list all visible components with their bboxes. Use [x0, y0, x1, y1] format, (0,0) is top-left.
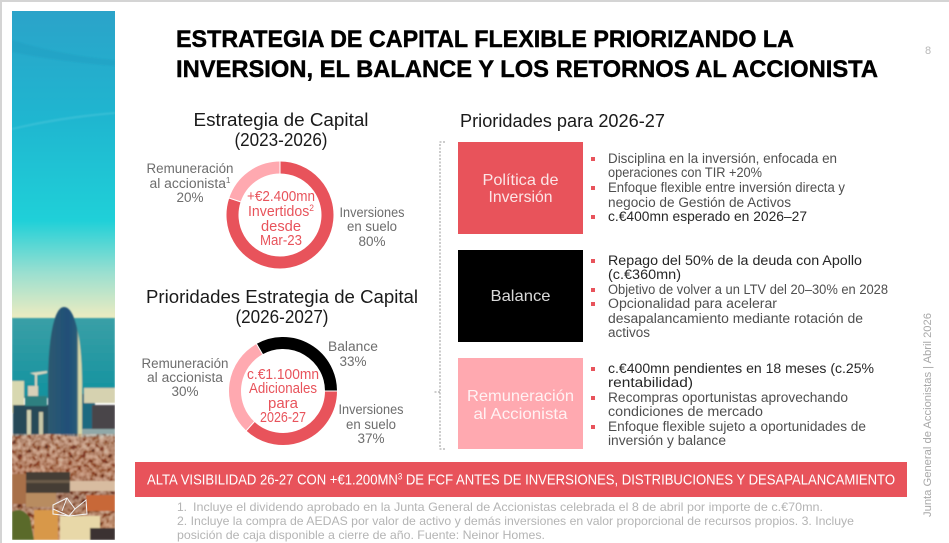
panel: balance sheet: [458, 250, 888, 342]
icon: white logo on photo: [53, 498, 87, 516]
bullet list: shareholder remuneration: rentabilidad): [608, 375, 693, 390]
bullet list: shareholder remuneration: Recompras oportunistas aprovechando: [608, 390, 848, 405]
label: land investment 37%: en suelo: [346, 417, 396, 432]
photo: Barcelona skyline with Agbar tower: [12, 11, 115, 540]
banner: FCF visibility: 3: [398, 472, 402, 482]
heading: capital strategy: Estrategia de Capital: [194, 109, 368, 130]
label: land investment 37%: [338, 402, 404, 446]
heading: priorities: [146, 286, 418, 327]
panel: investment policy: [458, 142, 845, 234]
bullet list: shareholder remuneration: condiciones de mercado: [608, 404, 763, 419]
bullet list: investment policy: [591, 151, 845, 224]
bullet list: balance: Repago del 50% de la deuda con Apollo: [608, 253, 862, 268]
bullet list: investment policy: operaciones con TIR +20%: [608, 165, 762, 180]
label: land investment 37%: 37%: [357, 431, 385, 446]
bullet list: investment policy: Enfoque flexible entre inversión directa y: [608, 180, 845, 195]
bullet list: shareholder remuneration: Enfoque flexible sujeto a oportunidades de: [608, 419, 866, 434]
box: investment policy: [458, 142, 583, 234]
footnotes: posición de caja disponible a cierre de año. Fuente: Neinor Homes.: [177, 528, 545, 542]
box: balance: Balance: [490, 288, 551, 305]
donut centre text: [247, 366, 319, 426]
banner: FCF visibility: [135, 462, 907, 497]
label: shareholder return 20%: al accionista: [150, 176, 224, 191]
box: shareholder remuneration: Remuneración: [467, 388, 574, 405]
footnotes: [177, 500, 854, 542]
page number: 8: [925, 45, 931, 57]
donut centre text: +€2.400mn: [247, 188, 315, 205]
bullet list: balance: activos: [608, 325, 650, 340]
bullet list: investment policy: c.€400mn esperado en 2026–27: [608, 209, 807, 224]
vertical side note: Junta General de Accionistas | Abril 2026: [922, 313, 934, 517]
label: land investment 80%: [340, 205, 405, 249]
bullet list: balance: (c.€360mn): [608, 267, 681, 282]
label: shareholder return 20%: 20%: [176, 190, 204, 205]
label: shareholder return 20%: Remuneración: [146, 161, 234, 176]
box: shareholder remuneration: [458, 358, 583, 449]
bullet list: balance: [591, 253, 888, 340]
bracket connecting priorities: [434, 142, 445, 449]
panel: capital strategy priorities 2026-2027: [142, 286, 418, 446]
title: ESTRATEGIA DE CAPITAL FLEXIBLE PRIORIZANDO LA: [176, 26, 794, 53]
banner: FCF visibility: ALTA VISIBILIDAD 26-27 CON +€1.200MN: [147, 472, 434, 488]
bullet list: shareholder remuneration: [591, 361, 874, 448]
label: shareholder return 20%: 1: [226, 176, 231, 185]
donut centre text: [247, 188, 315, 249]
donut centre text: Invertidos: [248, 203, 313, 220]
heading: priorities 2026-27: Prioridades para 2026-27: [460, 110, 665, 131]
label: shareholder return 20%: [146, 161, 234, 205]
box: balance: [458, 250, 583, 342]
donut chart: 80 / 20: [229, 161, 327, 263]
label: shareholder return 30%: Remuneración: [142, 356, 228, 371]
bullet list: investment policy: Disciplina en la inversión, enfocada en: [608, 151, 837, 166]
heading: priorities: Prioridades Estrategia de Capital: [146, 286, 418, 307]
label: shareholder return 30%: 30%: [171, 384, 199, 399]
donut centre text: 2: [309, 203, 314, 213]
label: land investment 80%: 80%: [358, 234, 386, 249]
label: land investment 80%: Inversiones: [340, 205, 405, 220]
bullet list: investment policy: negocio de Gestión de Activos: [608, 195, 791, 210]
title: [176, 26, 878, 83]
donut centre text: 2026-27: [260, 409, 306, 426]
label: balance 33%: [328, 339, 378, 369]
heading: capital strategy: [194, 109, 368, 150]
donut centre text: c.€1.100mn: [247, 366, 319, 383]
donut centre text: Adicionales: [249, 380, 317, 397]
heading: capital strategy: (2023-2026): [234, 129, 328, 150]
bullet list: balance: desapalancamiento mediante rotación de: [608, 311, 863, 326]
panel: shareholder remuneration: [458, 358, 874, 449]
box: investment policy: Inversión: [488, 189, 552, 206]
label: land investment 80%: en suelo: [347, 219, 397, 234]
bullet list: balance: Objetivo de volver a un LTV del 20–30% en 2028: [608, 282, 888, 297]
label: shareholder return 30%: al accionista: [147, 370, 223, 385]
bullet list: shareholder remuneration: c.€400mn pendientes en 18 meses (c.25%: [608, 361, 874, 376]
box: shareholder remuneration: al Accionista: [474, 406, 568, 423]
footnotes: 2. Incluye la compra de AEDAS por valor de activo y demás inversiones en valor proporcional de recursos propios. 3. Incluye: [177, 514, 854, 528]
donut centre text: para: [268, 395, 299, 412]
bullet list: shareholder remuneration: inversión y balance: [608, 433, 726, 448]
box: investment policy: Política de: [482, 172, 559, 189]
label: shareholder return 30%: [142, 356, 228, 399]
heading: priorities: (2026-2027): [236, 306, 328, 327]
donut centre text: Mar-23: [260, 232, 302, 249]
title: INVERSION, EL BALANCE Y LOS RETORNOS AL ACCIONISTA: [176, 56, 878, 83]
label: balance 33%: Balance: [328, 339, 378, 354]
label: balance 33%: 33%: [339, 354, 367, 369]
bullet list: balance: Opcionalidad para acelerar: [608, 296, 778, 311]
footnotes: Incluye el dividendo aprobado en la Junta General de Accionistas celebrada el 8 de abril por importe de c.€70mn.: [193, 500, 823, 514]
donut centre text: desde: [261, 218, 301, 235]
donut chart: 33 / 37 / 30: [235, 343, 338, 439]
footnotes: 1.: [177, 500, 187, 514]
panel: capital strategy 2023-2026: [146, 109, 405, 263]
label: land investment 37%: Inversiones: [338, 402, 404, 417]
